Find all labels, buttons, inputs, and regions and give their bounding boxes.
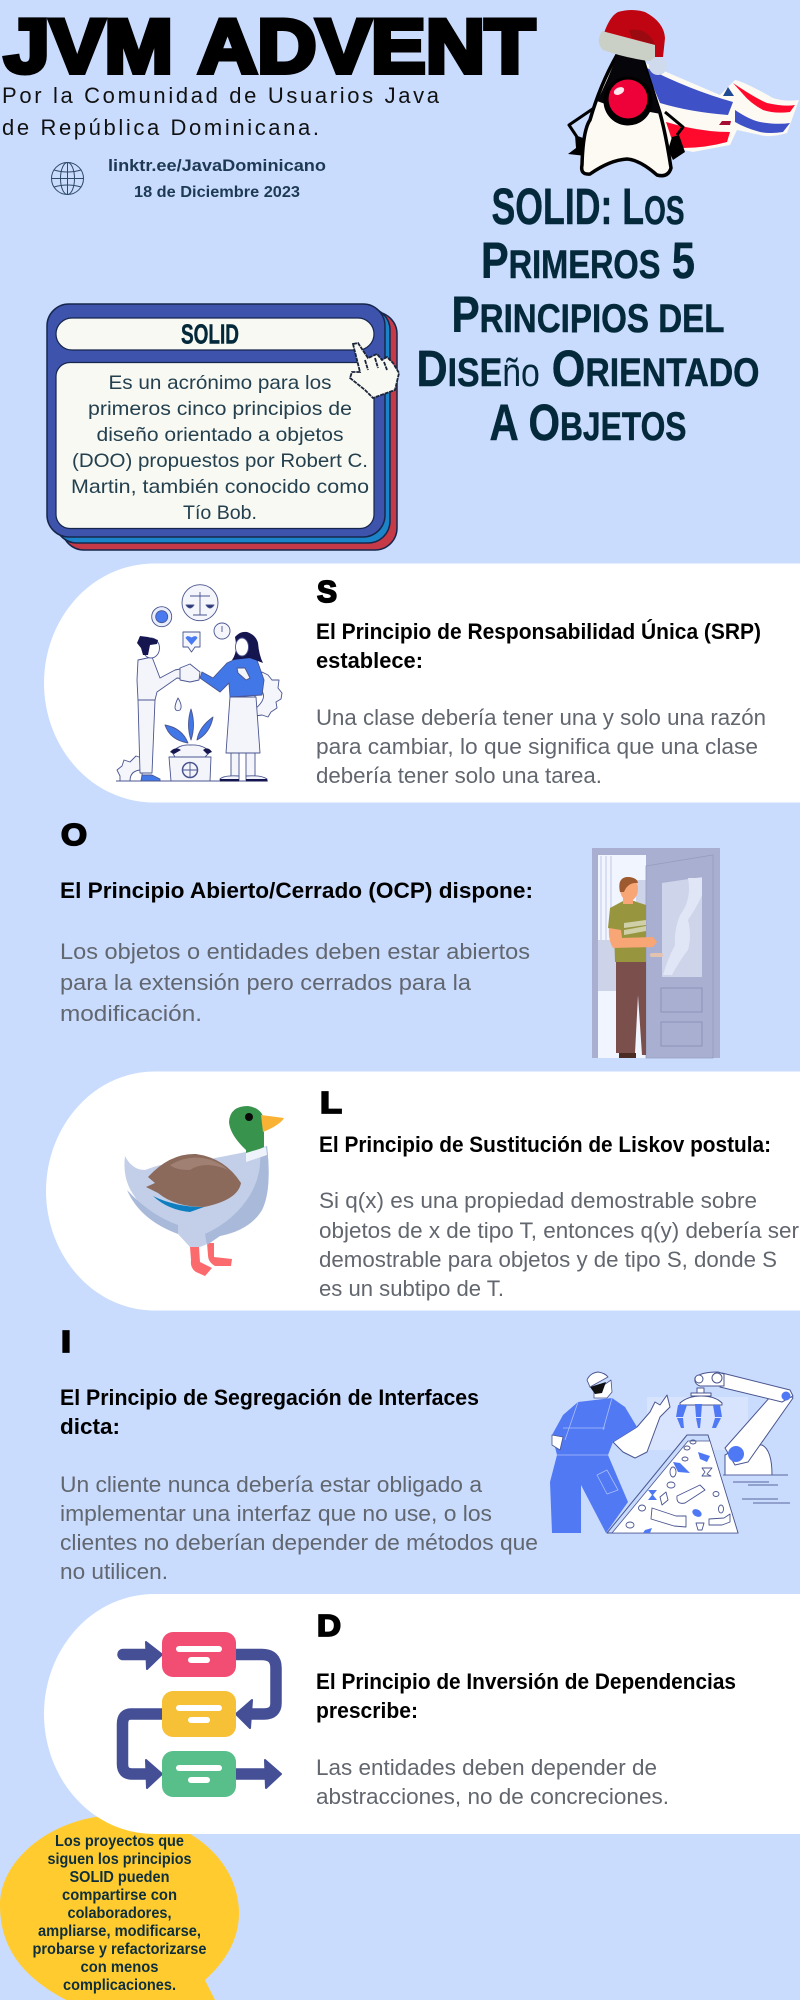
body text [316, 1755, 669, 1809]
badges [182, 585, 218, 621]
letter I: I [61, 1324, 71, 1359]
card body: Es un acrónimo para los [108, 372, 332, 394]
subtitle [2, 83, 440, 140]
heading: El Principio de Responsabilidad Única (SRP) [316, 619, 761, 644]
card body: Martin, también conocido como [71, 476, 369, 498]
title: JVM ADVENT: JVM [4, 4, 173, 90]
card body: diseño orientado a objetos [96, 424, 344, 446]
heading [60, 1385, 479, 1439]
main title: A OBJETOS [490, 394, 686, 451]
callout text: con menos [80, 1959, 158, 1976]
card heading [56, 318, 374, 350]
body text: abstracciones, no de concreciones. [316, 1784, 669, 1809]
letter O: O [61, 817, 87, 852]
main title [416, 178, 760, 451]
illustration: duck [124, 1106, 284, 1276]
card heading: SOLID [181, 318, 239, 350]
conveyor [607, 1435, 738, 1533]
main title: PRINCIPIOS DEL [452, 286, 724, 343]
callout text [32, 1833, 207, 1994]
link and date [108, 156, 326, 201]
body text: Una clase debería tener una y solo una razón [316, 705, 766, 730]
link and date: 18 de Diciembre 2023 [134, 184, 300, 201]
callout text: Los proyectos que [55, 1833, 184, 1850]
link and date: linktr.ee/JavaDominicano [108, 156, 326, 175]
arms [568, 108, 685, 160]
main title: DISEño ORIENTADO [416, 340, 760, 397]
heading [316, 1669, 736, 1723]
nose [604, 76, 652, 126]
body text: Las entidades deben depender de [316, 1755, 657, 1780]
heading: El Principio de Segregación de Interfaces [60, 1385, 479, 1410]
title: JVM ADVENT [4, 4, 535, 90]
heading: El Principio de Inversión de Dependencias [316, 1669, 736, 1694]
body text: debería tener solo una tarea. [316, 763, 602, 788]
subtitle: de República Dominicana. [2, 115, 319, 140]
man [138, 700, 155, 773]
callout text: compartirse con [62, 1887, 177, 1904]
body text [60, 1472, 538, 1584]
panel: O [60, 817, 720, 1058]
body text: Si q(x) es una propiedad demostrable sobre [319, 1188, 757, 1213]
body text: Los objetos o entidades deben estar abiertos [60, 939, 530, 964]
callout text: complicaciones. [63, 1977, 176, 1994]
callout text: siguen los principios [48, 1851, 192, 1868]
heading: El Principio de Sustitución de Liskov postula: [319, 1132, 771, 1157]
card body: primeros cinco principios de [88, 398, 352, 420]
santa hat [604, 10, 665, 57]
panel: L [46, 1072, 800, 1310]
lines [723, 1475, 790, 1503]
letter S: S [317, 574, 337, 609]
plant [165, 709, 213, 743]
body text: objetos de x de tipo T, entonces q(y) debería ser [319, 1218, 799, 1243]
illustration: worker and robot arm [550, 1372, 793, 1533]
worker [613, 1395, 670, 1458]
panel: SOLID definition card [47, 304, 397, 550]
subtitle: Por la Comunidad de Usuarios Java [2, 83, 440, 108]
gears [255, 672, 282, 717]
body text: para la extensión pero cerrados para la [60, 970, 472, 995]
flow diagram [122, 1632, 281, 1797]
callout text: SOLID pueden [70, 1869, 170, 1886]
title: JVM ADVENT: ADVENT [198, 4, 535, 90]
letter D: D [317, 1608, 341, 1643]
heading [316, 619, 761, 673]
callout text: probarse y refactorizarse [32, 1941, 207, 1958]
woman [231, 753, 255, 777]
heading: El Principio Abierto/Cerrado (OCP) dispone: [60, 878, 533, 903]
icon: pointer hand [350, 343, 399, 398]
panel: S [44, 564, 800, 802]
heading: establece: [316, 648, 423, 673]
heading: prescribe: [316, 1698, 418, 1723]
body text [316, 705, 766, 788]
body text: demostrable para objetos y de tipo S, donde S [319, 1247, 777, 1272]
main title: PRIMEROS 5 [481, 232, 695, 289]
letter L: L [320, 1085, 342, 1120]
panel: D [44, 1594, 800, 1834]
card body: (DOO) propuestos por Robert C. [72, 450, 368, 472]
panel: I [60, 1324, 793, 1584]
robot [680, 1372, 793, 1475]
callout text: ampliarse, modificarse, [38, 1923, 201, 1940]
body text [319, 1188, 799, 1301]
illustration: handshake [116, 585, 282, 782]
heading: dicta: [60, 1414, 120, 1439]
head [597, 55, 661, 114]
illustration: man at door [592, 848, 720, 1058]
icon: globe [52, 162, 84, 194]
body text: no utilicen. [60, 1559, 168, 1584]
callout: yellow bubble background [0, 1815, 239, 2000]
body [582, 55, 671, 176]
body text: clientes no deberían depender de métodos que [60, 1530, 538, 1555]
back layers [62, 312, 397, 550]
body text: implementar una interfaz que no use, o los [60, 1501, 492, 1526]
body text: Un cliente nunca debería estar obligado a [60, 1472, 483, 1497]
body text [60, 939, 530, 1026]
card body [56, 362, 374, 528]
card body: Tío Bob. [183, 502, 257, 524]
ground [116, 780, 268, 782]
body text: modificación. [60, 1001, 202, 1026]
mascot: Duke penguin with santa hat and flag [568, 10, 799, 176]
body text: para cambiar, lo que significa que una clase [316, 734, 758, 759]
callout text: colaboradores, [68, 1905, 172, 1922]
main title: SOLID: LOS [492, 178, 684, 235]
flag [643, 62, 799, 152]
body text: es un subtipo de T. [319, 1276, 504, 1301]
